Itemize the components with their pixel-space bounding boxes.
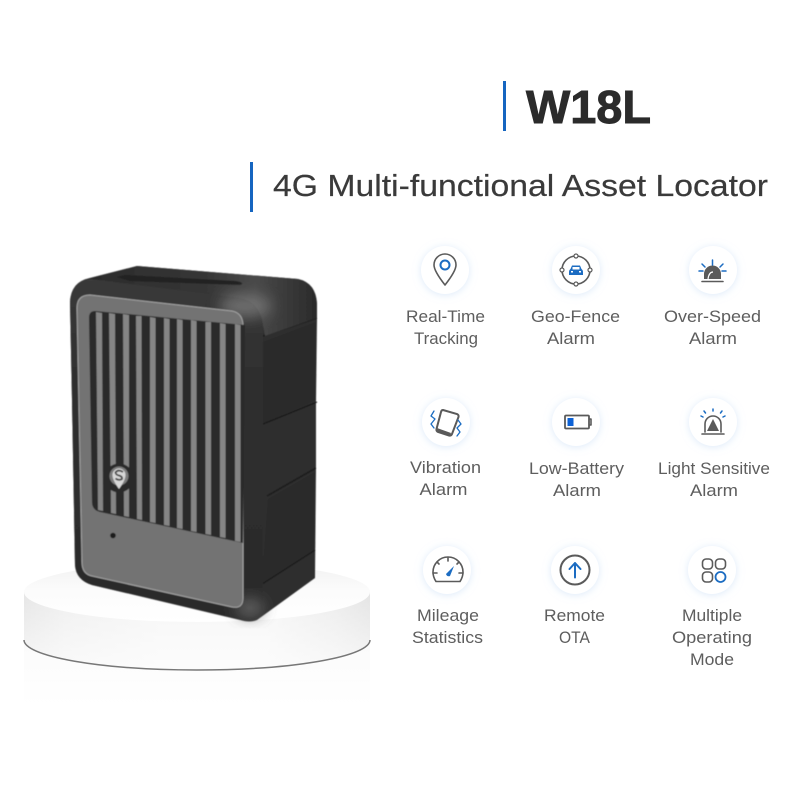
device vent stripes — [96, 312, 240, 542]
subtitle: 4G Multi-functional Asset Locator — [273, 169, 768, 203]
icon: speed siren — [699, 260, 726, 282]
device corner highlight — [219, 294, 271, 318]
device right side panels — [262, 318, 317, 584]
device top face — [70, 266, 317, 336]
icon: light siren — [701, 409, 725, 434]
label: vibration alarm: Vibration — [410, 459, 481, 477]
device bottom corner highlight — [236, 598, 264, 618]
label: multiple operating mode: Mode — [690, 651, 734, 669]
device top slot — [117, 275, 242, 285]
device body — [70, 266, 317, 622]
label: mileage statistics: Mileage — [417, 607, 479, 625]
label: multiple operating mode: Multiple — [682, 607, 742, 625]
feature: over-speed alarm — [664, 246, 761, 348]
title: W18L — [526, 81, 651, 133]
feature: geo-fence alarm — [531, 246, 620, 348]
platform bottom rim — [24, 640, 370, 670]
device front bezel — [70, 279, 263, 620]
feature: multiple operating mode — [672, 546, 752, 669]
title bar accent — [503, 81, 506, 131]
subtitle bar accent — [250, 162, 253, 212]
label: low-battery alarm: Low-Battery — [529, 460, 625, 478]
label: light sensitive alarm: Light Sensitive — [658, 460, 770, 478]
label: remote OTA: Remote — [544, 607, 605, 625]
icon: car in fence — [560, 254, 592, 286]
label: geo-fence alarm: Geo-Fence — [531, 308, 620, 326]
feature: real-time tracking — [406, 246, 485, 348]
label: real-time tracking: Real-Time — [406, 308, 485, 326]
label: low-battery alarm: Alarm — [553, 482, 601, 500]
label: over-speed alarm: Alarm — [689, 330, 737, 348]
platform side wall — [24, 592, 370, 670]
label: remote OTA — [544, 607, 605, 647]
icon: upload arrow — [560, 556, 590, 584]
device LED hole — [110, 533, 116, 538]
label: geo-fence alarm — [531, 308, 620, 348]
label: vibration alarm — [410, 459, 481, 499]
label: light sensitive alarm: Alarm — [690, 482, 738, 500]
label: over-speed alarm — [664, 308, 761, 348]
label: real-time tracking — [406, 308, 485, 348]
feature: low-battery alarm — [529, 398, 625, 500]
device vent recess — [89, 311, 245, 543]
label: light sensitive alarm — [658, 460, 770, 500]
platform reflection — [24, 640, 370, 706]
label: multiple operating mode — [672, 607, 752, 669]
label: vibration alarm: Alarm — [420, 481, 468, 499]
feature: vibration alarm — [410, 398, 481, 499]
device — [70, 266, 317, 622]
icon: vibrating phone — [431, 410, 461, 436]
icon: four mode tiles — [702, 559, 726, 582]
label: remote OTA: OTA — [559, 629, 590, 647]
feature: light sensitive alarm — [658, 398, 770, 500]
label: mileage statistics — [412, 607, 483, 647]
platform top surface — [24, 562, 370, 622]
icon: location pin — [434, 254, 456, 285]
label: mileage statistics: Statistics — [412, 629, 483, 647]
label: low-battery alarm — [529, 460, 625, 500]
platform — [24, 562, 370, 706]
label: geo-fence alarm: Alarm — [547, 330, 595, 348]
icon: speedometer — [433, 557, 463, 582]
icon: low battery — [565, 416, 591, 428]
feature: mileage statistics — [412, 546, 483, 647]
label: multiple operating mode: Operating — [672, 629, 752, 647]
feature: remote OTA — [544, 546, 605, 647]
label: real-time tracking: Tracking — [414, 330, 478, 348]
device front plate — [77, 295, 243, 607]
label: over-speed alarm: Over-Speed — [664, 308, 761, 326]
device logo button — [104, 464, 134, 492]
